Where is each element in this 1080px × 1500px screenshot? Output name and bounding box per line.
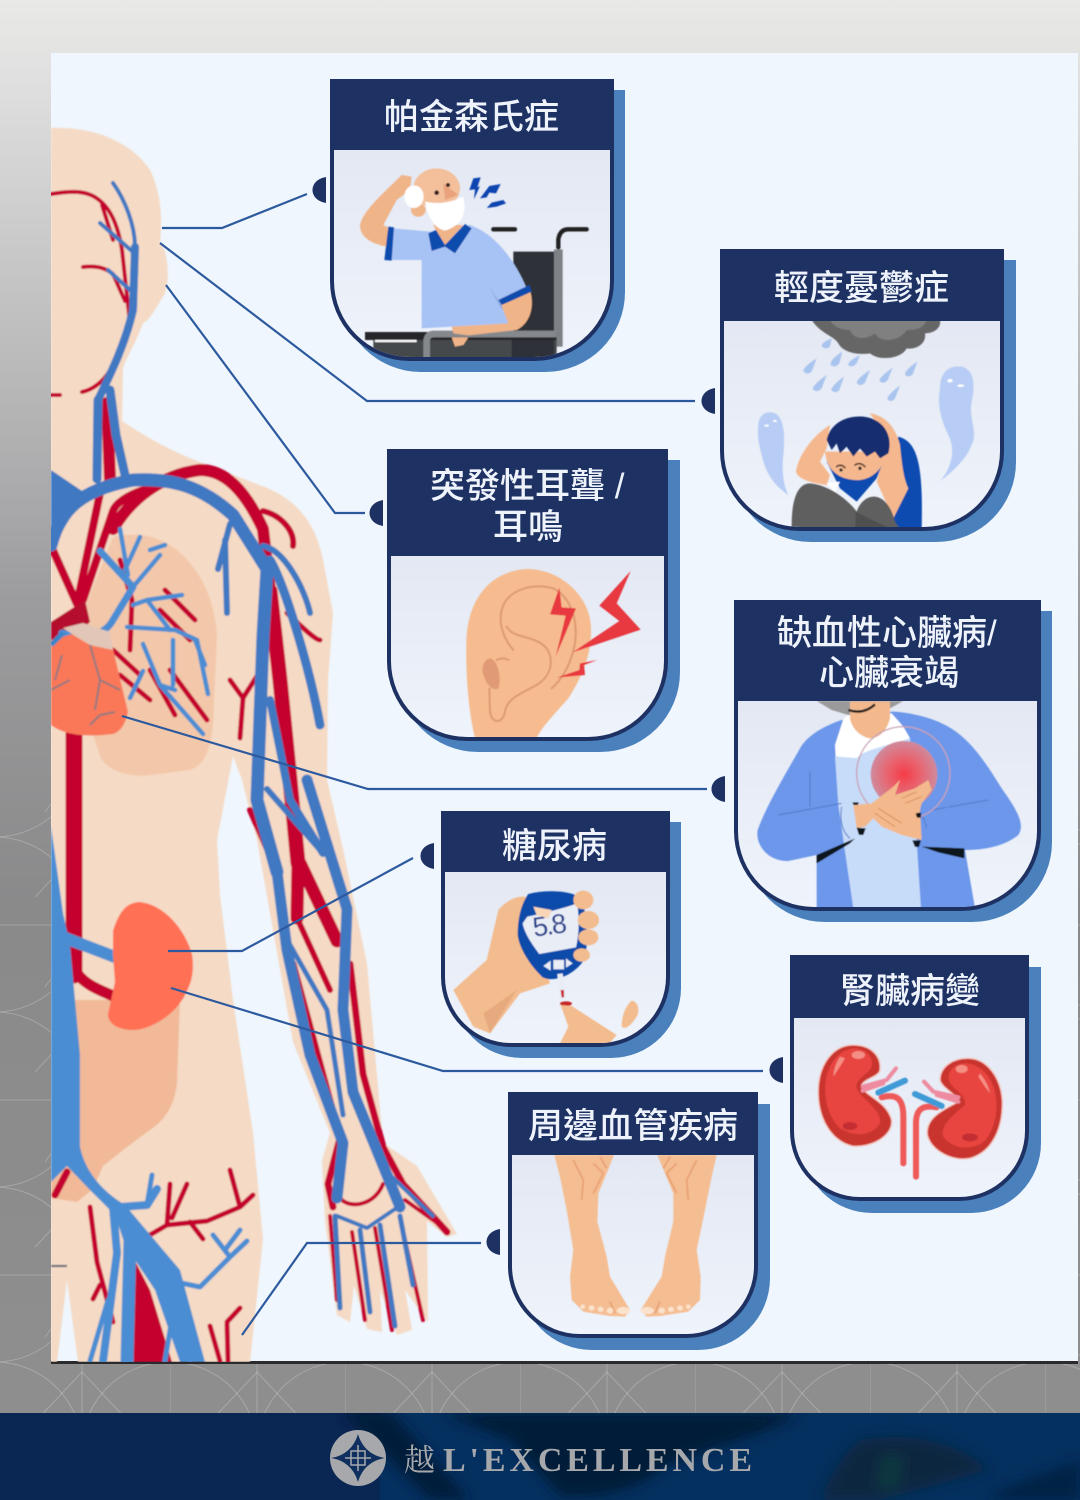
card title: 缺血性心臟病/ bbox=[777, 614, 997, 653]
card: peripheral vascular disease bbox=[508, 1092, 770, 1350]
heart bbox=[51, 631, 128, 735]
card: diabetes bbox=[441, 811, 681, 1058]
body silhouette bbox=[51, 128, 457, 1362]
brand name: L'EXCELLENCE bbox=[443, 1442, 752, 1479]
card title bbox=[777, 614, 997, 693]
card title: 周邊血管疾病 bbox=[528, 1107, 738, 1146]
lung area bbox=[80, 535, 217, 776]
footer band bbox=[0, 1410, 1080, 1500]
card: mild depression bbox=[720, 249, 1016, 542]
card title: 心臟衰竭 bbox=[819, 654, 959, 693]
icon: pair of feet with varicose veins bbox=[554, 1155, 717, 1317]
veins bbox=[51, 183, 433, 1326]
card title bbox=[430, 467, 625, 547]
card title: 突發性耳聾 / bbox=[430, 467, 625, 506]
icon: glucose meter and finger: 5.8 bbox=[531, 907, 568, 943]
card: kidney disease bbox=[790, 955, 1041, 1213]
small marker line bbox=[51, 1265, 67, 1267]
arteries bbox=[51, 192, 447, 1361]
card title: 耳鳴 bbox=[493, 508, 563, 547]
abdomen area bbox=[51, 1000, 180, 1202]
icon: glucose meter and finger bbox=[453, 891, 638, 1047]
card title: 帕金森氏症 bbox=[384, 98, 559, 137]
card title: 輕度憂鬱症 bbox=[774, 269, 949, 308]
connector lines bbox=[122, 194, 763, 1335]
footer background photo shading bbox=[340, 1410, 1080, 1500]
icon: pair of kidneys bbox=[818, 1045, 1002, 1177]
icon: man with tremor in wheelchair bbox=[360, 168, 587, 367]
connector end dots bbox=[312, 177, 783, 1255]
anatomy figure: body with circulatory system bbox=[51, 128, 457, 1362]
card: Parkinson's disease bbox=[330, 79, 625, 372]
logo emblem bbox=[330, 1430, 386, 1486]
card title: 糖尿病 bbox=[502, 827, 607, 866]
icon: depressed boy under rain cloud bbox=[758, 320, 974, 532]
brand name: 越 bbox=[404, 1443, 435, 1478]
card title: 腎臟病變 bbox=[840, 972, 980, 1011]
card: ischemic heart disease / heart failure bbox=[734, 600, 1052, 922]
kidney bbox=[108, 902, 193, 1030]
card: sudden deafness / tinnitus bbox=[387, 449, 680, 752]
icon: woman holding chest bbox=[757, 701, 1021, 908]
icon: ear with lightning bbox=[466, 569, 641, 738]
